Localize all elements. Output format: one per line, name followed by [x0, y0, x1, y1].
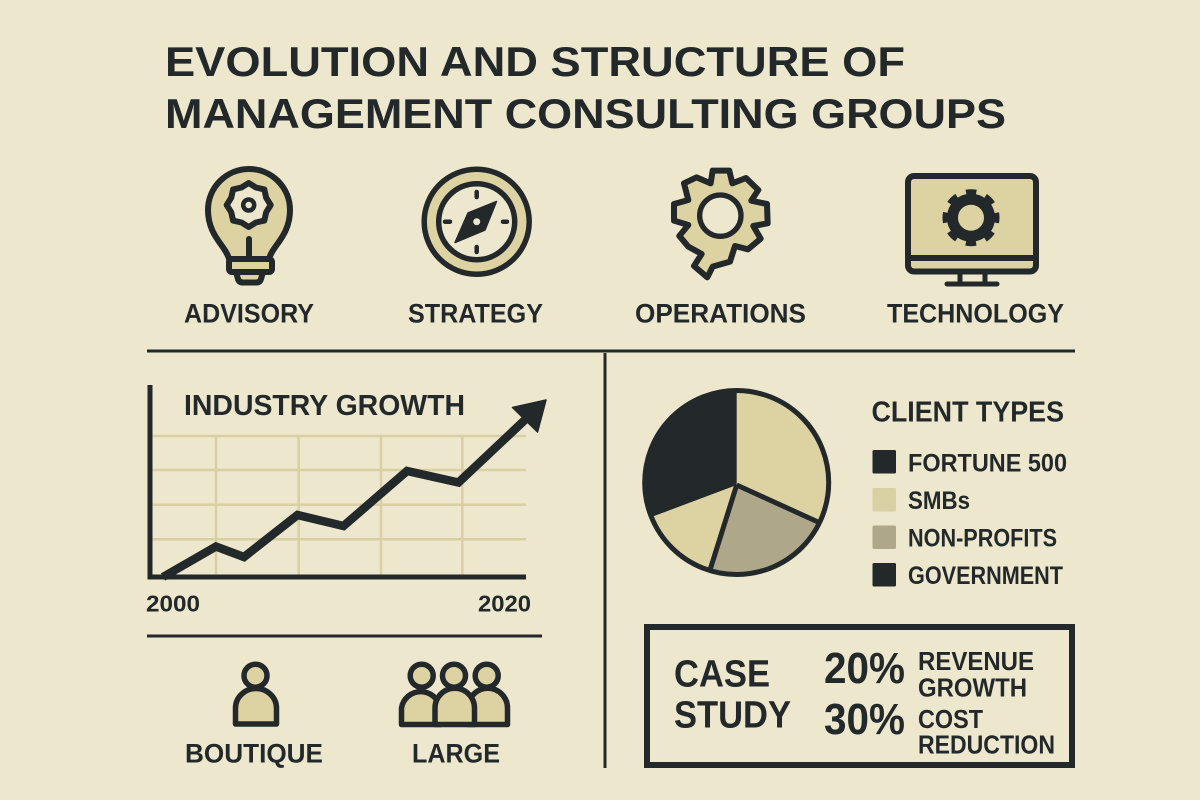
panel: case study: [647, 627, 1072, 765]
panel: industry growth chart: [146, 385, 546, 616]
label: operations: OPERATIONS: [635, 298, 806, 328]
panel: firm size: [185, 664, 508, 768]
legend item: smbs: [872, 487, 970, 515]
legend heading: CLIENT TYPES: [872, 396, 1064, 428]
axis label: 2000: 2000: [146, 590, 200, 616]
stat: cost reduction: 30%: [824, 695, 905, 744]
title: EVOLUTION AND STRUCTURE OF: [165, 38, 905, 85]
case study heading: [674, 654, 791, 736]
case study frame: [647, 627, 1072, 765]
stat: cost reduction: COST: [918, 704, 983, 734]
label: strategy: STRATEGY: [408, 298, 543, 328]
label: technology: TECHNOLOGY: [887, 298, 1064, 328]
chart axes: [150, 385, 526, 577]
stat: cost reduction: REDUCTION: [918, 730, 1055, 760]
chart grid: [152, 436, 526, 576]
icon: large group: [402, 664, 508, 724]
panel: service categories: [184, 169, 1064, 328]
legend item: fortune 500: FORTUNE 500: [908, 450, 1067, 478]
case study heading: CASE: [674, 654, 770, 696]
legend item: smbs: SMBs: [908, 487, 970, 515]
divider lines: [147, 351, 1075, 768]
panel: client types: [645, 390, 1067, 590]
growth line arrow: [163, 400, 546, 577]
legend item: non-profits: NON-PROFITS: [908, 524, 1057, 552]
title: MANAGEMENT CONSULTING GROUPS: [165, 90, 1006, 137]
stat: revenue growth: GROWTH: [918, 672, 1027, 702]
case study heading: STUDY: [674, 694, 791, 736]
icon: strategy compass: [424, 169, 529, 274]
pie chart: [645, 390, 829, 574]
title: [165, 38, 1006, 137]
chart title: INDUSTRY GROWTH: [184, 390, 465, 422]
icon: advisory light bulb: [208, 169, 290, 282]
icon: technology monitor: [908, 176, 1036, 284]
stat: revenue growth: REVENUE: [918, 646, 1034, 676]
stat: revenue growth: 20%: [824, 644, 905, 693]
label: boutique: BOUTIQUE: [185, 738, 323, 768]
label: large: LARGE: [412, 738, 500, 768]
stat: revenue growth: [824, 644, 1034, 702]
icon: operations gear: [674, 171, 768, 277]
legend item: government: GOVERNMENT: [908, 562, 1063, 590]
icon: boutique person: [236, 664, 276, 724]
stat: cost reduction: [824, 695, 1055, 760]
axis label: 2020: 2020: [478, 590, 531, 616]
label: advisory: ADVISORY: [184, 298, 314, 328]
